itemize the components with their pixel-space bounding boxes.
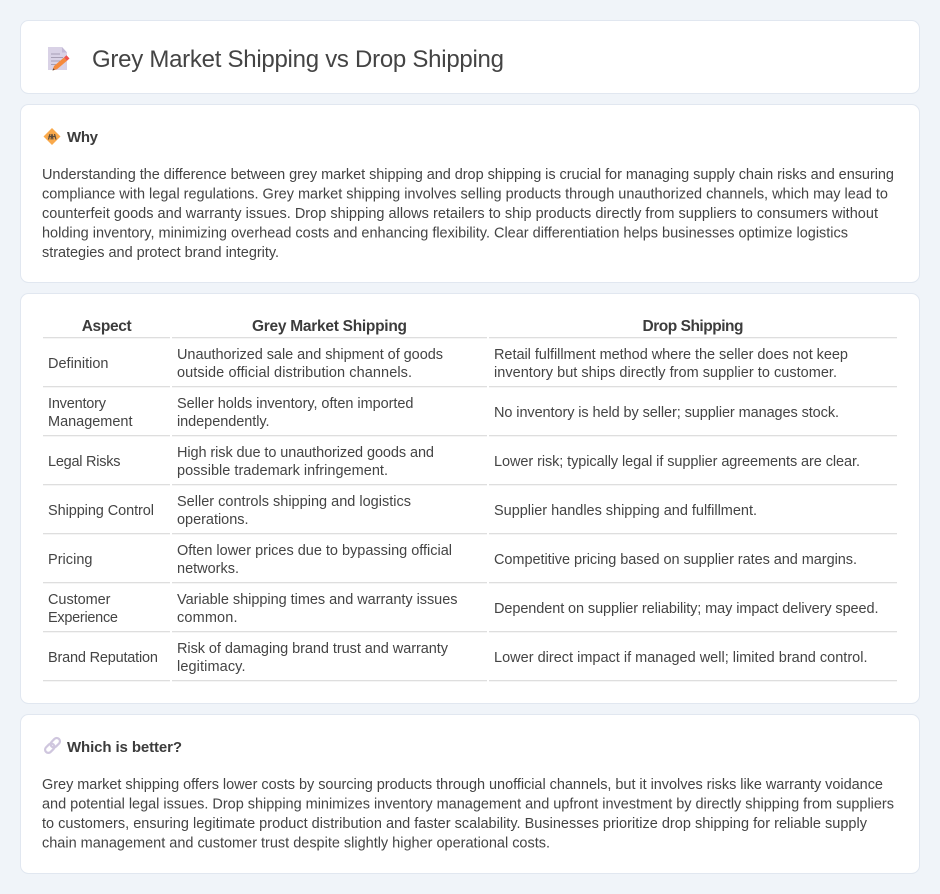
row: customer experience: common. bbox=[177, 610, 238, 626]
row: shipping control: Supplier handles shipping and fulfillment. bbox=[494, 503, 757, 519]
text block: which is better paragraph: and potential legal issues. Drop shipping minimizes inventory management and upfront investment by directly shipping from suppliers bbox=[42, 796, 894, 812]
row: legal risks bbox=[48, 445, 860, 479]
table header row: Aspect bbox=[82, 318, 132, 335]
row: legal risks: High risk due to unauthorized goods and bbox=[177, 445, 434, 461]
row: customer experience: Dependent on supplier reliability; may impact delivery speed. bbox=[494, 601, 878, 617]
row: pricing: Competitive pricing based on supplier rates and margins. bbox=[494, 552, 857, 568]
row: shipping control bbox=[48, 494, 757, 528]
row: customer experience bbox=[48, 592, 878, 626]
row: pricing: networks. bbox=[177, 561, 239, 577]
row: inventory management: No inventory is held by seller; supplier manages stock. bbox=[494, 405, 839, 421]
row: customer experience: Variable shipping times and warranty issues bbox=[177, 592, 458, 608]
table header row: Drop Shipping bbox=[642, 318, 744, 335]
row: legal risks: possible trademark infringement. bbox=[177, 463, 388, 479]
row: definition: inventory but ships directly from supplier to customer. bbox=[494, 365, 837, 381]
row: shipping control: Seller controls shipping and logistics bbox=[177, 494, 411, 510]
row: definition: Unauthorized sale and shipment of goods bbox=[177, 347, 443, 363]
row: pricing: Pricing bbox=[48, 552, 92, 568]
heading: which is better: Which is better? bbox=[67, 739, 182, 756]
text block: which is better paragraph: to customers, ensuring legitimate product distribution and faster scalability. Businesses prioritize drop shipping for reliable supply bbox=[42, 816, 868, 832]
icon: warning diamond bbox=[44, 128, 60, 145]
row: inventory management: Inventory bbox=[48, 396, 107, 412]
icon: chain link bbox=[44, 737, 61, 754]
row: inventory management: independently. bbox=[177, 414, 270, 430]
text block: why paragraph: holding inventory, minimizing overhead costs and enhancing flexibility. Clear differentiation helps businesses optimize logistics bbox=[42, 226, 848, 242]
text block: which is better paragraph: Grey market shipping offers lower costs by sourcing products through unofficial channels, but it involves risks like warranty voidance bbox=[42, 777, 883, 793]
row: definition: outside official distribution channels. bbox=[177, 365, 412, 381]
row: legal risks: Legal Risks bbox=[48, 454, 120, 470]
row: shipping control: Shipping Control bbox=[48, 503, 154, 519]
row: pricing bbox=[48, 543, 857, 577]
heading: why: Why bbox=[67, 129, 99, 146]
row: shipping control: operations. bbox=[177, 512, 248, 528]
row: brand reputation: legitimacy. bbox=[177, 659, 246, 675]
row: customer experience: Customer bbox=[48, 592, 111, 608]
row: legal risks: Lower risk; typically legal if supplier agreements are clear. bbox=[494, 454, 860, 470]
text block: why paragraph bbox=[42, 167, 894, 261]
text block: why paragraph: compliance with legal regulations. Grey market shipping involves selling products through unauthorized channels, which may lead to bbox=[42, 186, 888, 202]
row: inventory management: Management bbox=[48, 414, 132, 430]
row: brand reputation: Brand Reputation bbox=[48, 650, 158, 666]
row: definition: Retail fulfillment method where the seller does not keep bbox=[494, 347, 848, 363]
icon: document with pencil bbox=[48, 47, 70, 70]
text block: why paragraph: counterfeit goods and warranty issues. Drop shipping allows retailers to ship products directly from suppliers to consumers without bbox=[42, 206, 878, 222]
panel: title header bbox=[20, 20, 920, 94]
row: customer experience: Experience bbox=[48, 610, 118, 626]
row: brand reputation: Lower direct impact if managed well; limited brand control. bbox=[494, 650, 868, 666]
row: definition: Definition bbox=[48, 356, 108, 372]
row: inventory management bbox=[48, 396, 839, 430]
title: Grey Market Shipping vs Drop Shipping bbox=[92, 46, 504, 73]
table header row: Grey Market Shipping bbox=[252, 318, 407, 335]
table header row bbox=[82, 318, 743, 335]
row: pricing: Often lower prices due to bypassing official bbox=[177, 543, 452, 559]
row: inventory management: Seller holds inventory, often imported bbox=[177, 396, 414, 412]
panel: which is better bbox=[20, 714, 920, 874]
text block: which is better paragraph bbox=[42, 777, 894, 852]
row: definition bbox=[48, 347, 848, 381]
text block: which is better paragraph: chain management and customer trust despite slightly higher operational costs. bbox=[42, 836, 550, 852]
text block: why paragraph: strategies and protect brand integrity. bbox=[42, 245, 279, 261]
panel: why bbox=[20, 104, 920, 282]
panel: comparison table bbox=[20, 294, 920, 704]
text block: why paragraph: Understanding the difference between grey market shipping and drop shipping is crucial for managing supply chain risks and ensuring bbox=[42, 167, 894, 183]
row: brand reputation bbox=[48, 641, 868, 675]
row: brand reputation: Risk of damaging brand trust and warranty bbox=[177, 641, 449, 657]
